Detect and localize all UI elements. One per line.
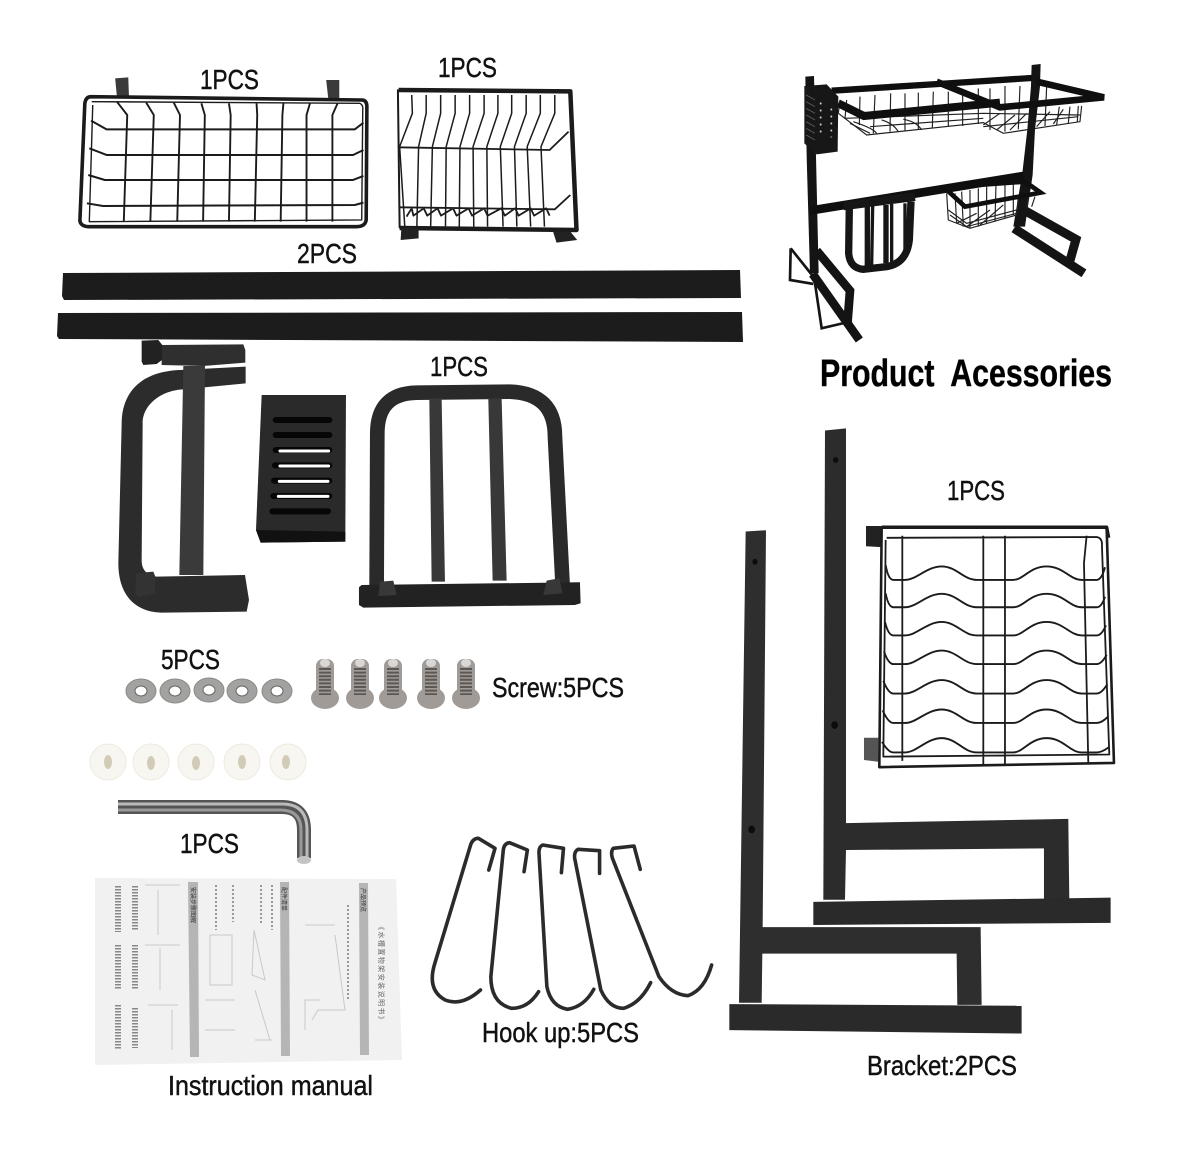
left foot and towel loop xyxy=(790,248,859,340)
wire basket, wide xyxy=(80,77,367,227)
instruction manual: 产品预览 xyxy=(359,888,367,912)
knife holder xyxy=(804,84,838,154)
washers xyxy=(126,678,292,703)
rail bars xyxy=(57,270,743,342)
label: Screw 5PCS: Screw:5PCS xyxy=(492,672,624,703)
label: 2PCS rails: 2PCS xyxy=(297,238,357,269)
label: Instruction manual: Instruction manual xyxy=(168,1070,373,1101)
right post xyxy=(1013,64,1041,227)
bracket, back xyxy=(813,428,1111,925)
instruction manual xyxy=(95,878,402,1065)
screws xyxy=(311,659,480,709)
slotted box holder xyxy=(256,395,346,543)
label: 1PCS dish rack: 1PCS xyxy=(438,52,497,83)
label: 1PCS hex key: 1PCS xyxy=(180,828,239,859)
manual title: 《水槽置物架安装说明书》 xyxy=(377,923,386,1023)
rail 2 xyxy=(57,312,743,342)
hex key xyxy=(118,804,311,864)
top shelf frame xyxy=(832,78,1032,91)
plate wire rack xyxy=(864,526,1114,767)
hooks xyxy=(432,838,712,1009)
small hanging basket xyxy=(947,182,1035,228)
label: 5PCS washers: 5PCS xyxy=(161,644,220,675)
lower bar xyxy=(810,176,1023,211)
instruction manual: 安装步骤图解 xyxy=(189,887,197,923)
label: 1PCS plate frame: 1PCS xyxy=(430,351,488,382)
right foot xyxy=(1014,211,1084,273)
instruction manual: 配件清单 xyxy=(280,887,288,911)
plate holder xyxy=(843,197,915,269)
wire dish rack xyxy=(398,89,577,243)
label: 1PCS plate rack: 1PCS xyxy=(947,475,1005,506)
wire baskets, top shelf xyxy=(838,86,1082,135)
plate frame xyxy=(359,392,581,608)
rail 1 xyxy=(62,270,741,300)
heading: Product Acessories: Product Acessories xyxy=(820,353,1112,395)
small basket frame xyxy=(944,182,1041,207)
side handle frame xyxy=(118,340,249,613)
label: Hook up 5PCS: Hook up:5PCS xyxy=(482,1017,639,1048)
bracket, front xyxy=(729,530,1022,1034)
clear bumpers xyxy=(90,744,306,780)
label: 1PCS wire basket: 1PCS xyxy=(200,64,259,95)
rack photo xyxy=(790,64,1104,340)
left post xyxy=(805,76,819,273)
label: Bracket 2PCS: Bracket:2PCS xyxy=(867,1050,1017,1081)
